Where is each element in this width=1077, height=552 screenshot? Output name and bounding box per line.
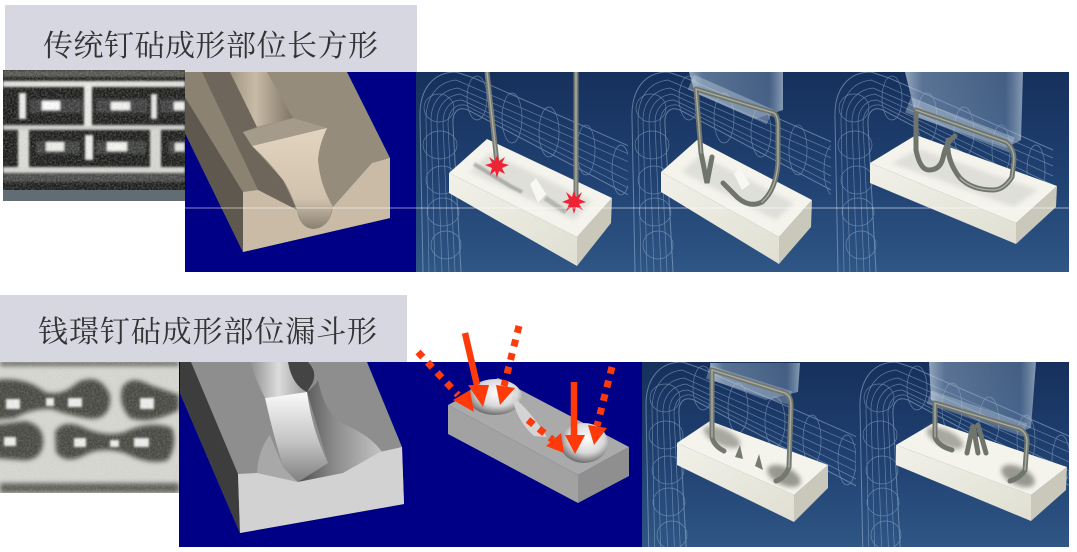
- panel: funnel staple bending: [642, 362, 864, 552]
- diagram: funnel block with force arrows: [418, 326, 629, 503]
- anvil funnel strip: [265, 392, 328, 482]
- anvil front face: [238, 447, 404, 533]
- wire: funnel staple fully formed: [935, 403, 1027, 481]
- panel: staple legs contact anvil: [416, 72, 638, 272]
- staple driver: [929, 362, 1036, 432]
- centre ramp: [512, 396, 547, 437]
- panel: funnel staple formed: [856, 362, 1077, 552]
- anvil groove: [250, 362, 307, 398]
- panel: new staple row heading: [0, 295, 407, 362]
- title: traditional staple: 传统钉砧成形部位长方形: [43, 30, 378, 63]
- anvil side face: [180, 362, 240, 533]
- anvil side face: [185, 97, 243, 252]
- anvil front face: [243, 158, 390, 252]
- wire: funnel staple partly formed: [712, 370, 791, 481]
- separator line: [185, 208, 1069, 209]
- arrows: solid and dotted: [418, 326, 612, 454]
- title: B-form staple funnel: 钱璟钉砧成形部位漏斗形: [38, 316, 377, 349]
- staple driver: [905, 72, 1023, 148]
- panel: rectangular anvil 3D model: [185, 72, 416, 272]
- wire: fully formed staple: [916, 110, 1014, 190]
- panel: traditional staple formed: [831, 72, 1069, 272]
- photo: rectangular staple anvil pockets: [3, 70, 185, 201]
- photo: funnel anvil pockets: [0, 361, 179, 493]
- left dimple: [468, 379, 522, 415]
- panel: traditional staple bending: [628, 72, 850, 272]
- anvil funnel recess: [252, 128, 333, 229]
- wire: staple legs: [487, 72, 576, 200]
- staple driver: [708, 363, 800, 400]
- panel: traditional staple row heading: [5, 5, 417, 72]
- icon: red contact spark left: [485, 155, 509, 178]
- panel: funnel anvil 3D model: [179, 362, 642, 547]
- wire: partly formed staple: [696, 89, 778, 204]
- anvil cones: [257, 435, 298, 482]
- right dimple: [560, 423, 608, 463]
- staple driver: [689, 72, 783, 119]
- icon: red contact spark right: [562, 190, 586, 214]
